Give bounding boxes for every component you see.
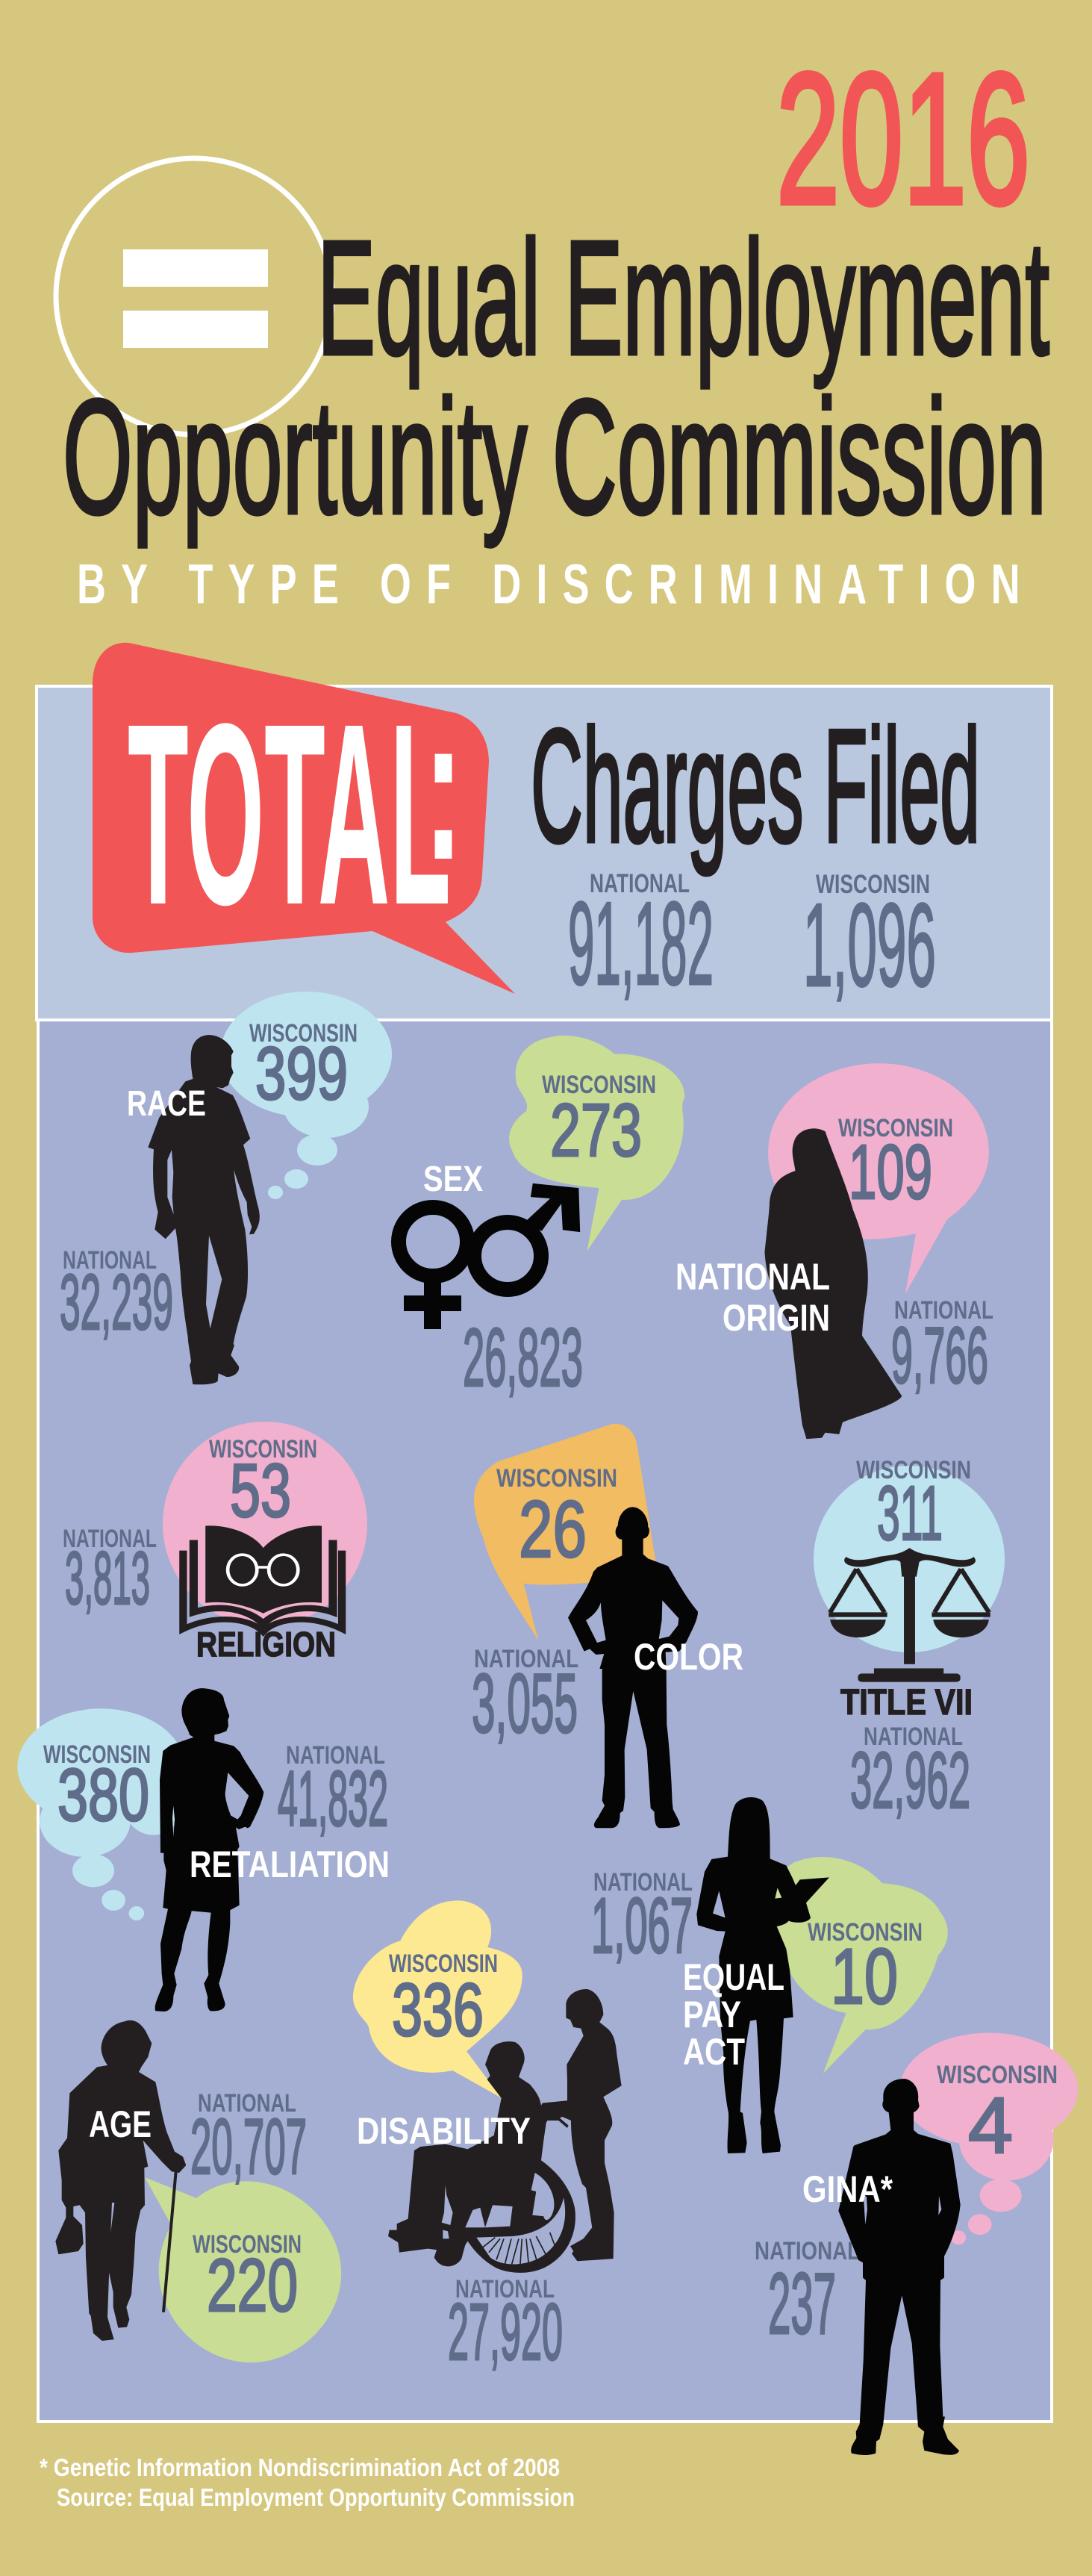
silhouette [568, 1507, 698, 1828]
category: gina: 237 [768, 2255, 836, 2352]
silhouette [696, 1797, 829, 2153]
wheelchair and caregiver silhouette [388, 1989, 622, 2273]
category: race [60, 992, 392, 1384]
category: national origin: 109 [849, 1129, 932, 1215]
national total [568, 869, 714, 1009]
wisconsin total [803, 870, 936, 1011]
wisconsin figure: WISCONSIN [389, 1950, 498, 1978]
national figure: NATIONAL [894, 1296, 993, 1325]
panel: total charges background [37, 686, 1052, 1020]
national figure: NATIONAL [198, 2089, 296, 2118]
wisconsin figure: WISCONSIN [43, 1740, 151, 1769]
category: religion: 3,813 [65, 1537, 150, 1620]
category: religion: 53 [230, 1449, 291, 1533]
gender symbols icon [399, 1183, 580, 1329]
wisconsin figure: WISCONSIN [838, 1114, 953, 1142]
speech bubble [145, 2177, 341, 2362]
book and glasses icon [183, 1525, 342, 1631]
speech bubble [509, 1036, 684, 1251]
thought bubble [220, 992, 392, 1199]
silhouette [838, 2079, 961, 2455]
category: national origin: 9,766 [891, 1310, 988, 1400]
label: TITLE VII [840, 1683, 973, 1723]
label [676, 1256, 830, 1339]
wisconsin figure: WISCONSIN [937, 2061, 1058, 2089]
category: equal pay act: 1,067 [591, 1882, 693, 1970]
silhouette with cane [55, 2020, 186, 2341]
category: sex [399, 1036, 684, 1404]
footnote and source: Source: Equal Employment Opportunity Commission [57, 2483, 575, 2511]
category: retaliation: 380 [57, 1753, 149, 1836]
category: color: 26 [519, 1484, 587, 1574]
speech bubble [768, 1063, 989, 1294]
wisconsin figure: WISCONSIN [209, 1435, 317, 1463]
category: sex: 273 [550, 1089, 642, 1172]
thought bubble [17, 1708, 184, 1920]
wisconsin figure: WISCONSIN [193, 2230, 302, 2259]
title [63, 208, 1049, 548]
infographic canvas: 91,182 [568, 878, 714, 1009]
national figure: NATIONAL [755, 2237, 860, 2265]
category: equal pay act: 10 [831, 1933, 898, 2020]
category: title vii [814, 1456, 1005, 1825]
wisconsin figure: WISCONSIN [808, 1918, 923, 1947]
national figure: NATIONAL [864, 1723, 963, 1751]
category: national origin [676, 1063, 993, 1439]
thought bubble [899, 2032, 1078, 2244]
subtitle: BY TYPE OF DISCRIMINATION [77, 553, 1020, 615]
logo: equals sign in circle [56, 158, 332, 435]
category: disability: 27,920 [448, 2286, 563, 2377]
category: race: 399 [255, 1032, 348, 1116]
silhouette [155, 1688, 263, 2012]
label: RACE [127, 1084, 206, 1124]
silhouette [764, 1128, 902, 1439]
national figure: NATIONAL [455, 2275, 555, 2303]
category: retaliation [17, 1688, 390, 2012]
category: religion [63, 1422, 367, 1664]
category: disability [353, 1900, 622, 2377]
wisconsin figure: WISCONSIN [856, 1456, 971, 1484]
label: ACT [683, 2031, 745, 2073]
speech bubble [353, 1900, 522, 2098]
category: race: 32,239 [60, 1259, 173, 1346]
category: age: 20,707 [190, 2103, 307, 2191]
speech bubble [474, 1424, 658, 1640]
scales of justice icon [829, 1548, 990, 1682]
label: RETALIATION [190, 1844, 390, 1885]
label: NATIONAL [676, 1256, 830, 1298]
wisconsin figure: WISCONSIN [496, 1464, 617, 1493]
category: age [55, 2020, 341, 2362]
infographic canvas: 1,096 [803, 880, 936, 1011]
category: color [472, 1424, 743, 1828]
bubble [163, 1422, 367, 1626]
label: PAY [683, 1994, 741, 2035]
category: gina: 4 [968, 2082, 1013, 2170]
national figure: NATIONAL [474, 1645, 578, 1673]
speech bubble [766, 1857, 948, 2073]
category: equal pay act [591, 1797, 948, 2153]
label: GINA* [802, 2168, 893, 2210]
wisconsin figure: WISCONSIN [249, 1019, 358, 1048]
infographic canvas: TOTAL [128, 671, 451, 959]
label: AGE [89, 2103, 152, 2145]
national figure: NATIONAL [593, 1868, 693, 1897]
national figure: NATIONAL [63, 1525, 157, 1553]
footnote and source [40, 2454, 575, 2511]
category: sex: 26,823 [463, 1312, 583, 1404]
category: disability: 336 [392, 1968, 484, 2052]
label: DISABILITY [357, 2110, 531, 2152]
silhouette [148, 1035, 260, 1384]
category: title vii: 311 [877, 1470, 943, 1556]
national total: NATIONAL [590, 869, 690, 898]
label: RELIGION [196, 1625, 336, 1664]
footnote and source: * Genetic Information Nondiscrimination Act of 2008 [40, 2454, 560, 2481]
label: ORIGIN [723, 1297, 830, 1339]
label: EQUAL [683, 1956, 784, 1998]
panel: categories background [38, 1020, 1052, 2421]
label: COLOR [634, 1636, 743, 1678]
category: gina [755, 2032, 1078, 2455]
bubble [814, 1466, 1005, 1652]
category: age: 220 [207, 2244, 298, 2327]
national figure: NATIONAL [286, 1741, 385, 1770]
wisconsin total: WISCONSIN [816, 870, 930, 899]
label: SEX [423, 1160, 483, 1199]
infographic canvas: 41,832 [278, 1755, 388, 1843]
label [683, 1956, 784, 2073]
national figure: NATIONAL [63, 1246, 157, 1275]
wisconsin figure: WISCONSIN [542, 1071, 656, 1099]
total speech bubble [93, 643, 515, 994]
category: title vii: 32,962 [850, 1735, 970, 1825]
category: color: 3,055 [472, 1657, 578, 1750]
total speech bubble: : [423, 671, 464, 903]
